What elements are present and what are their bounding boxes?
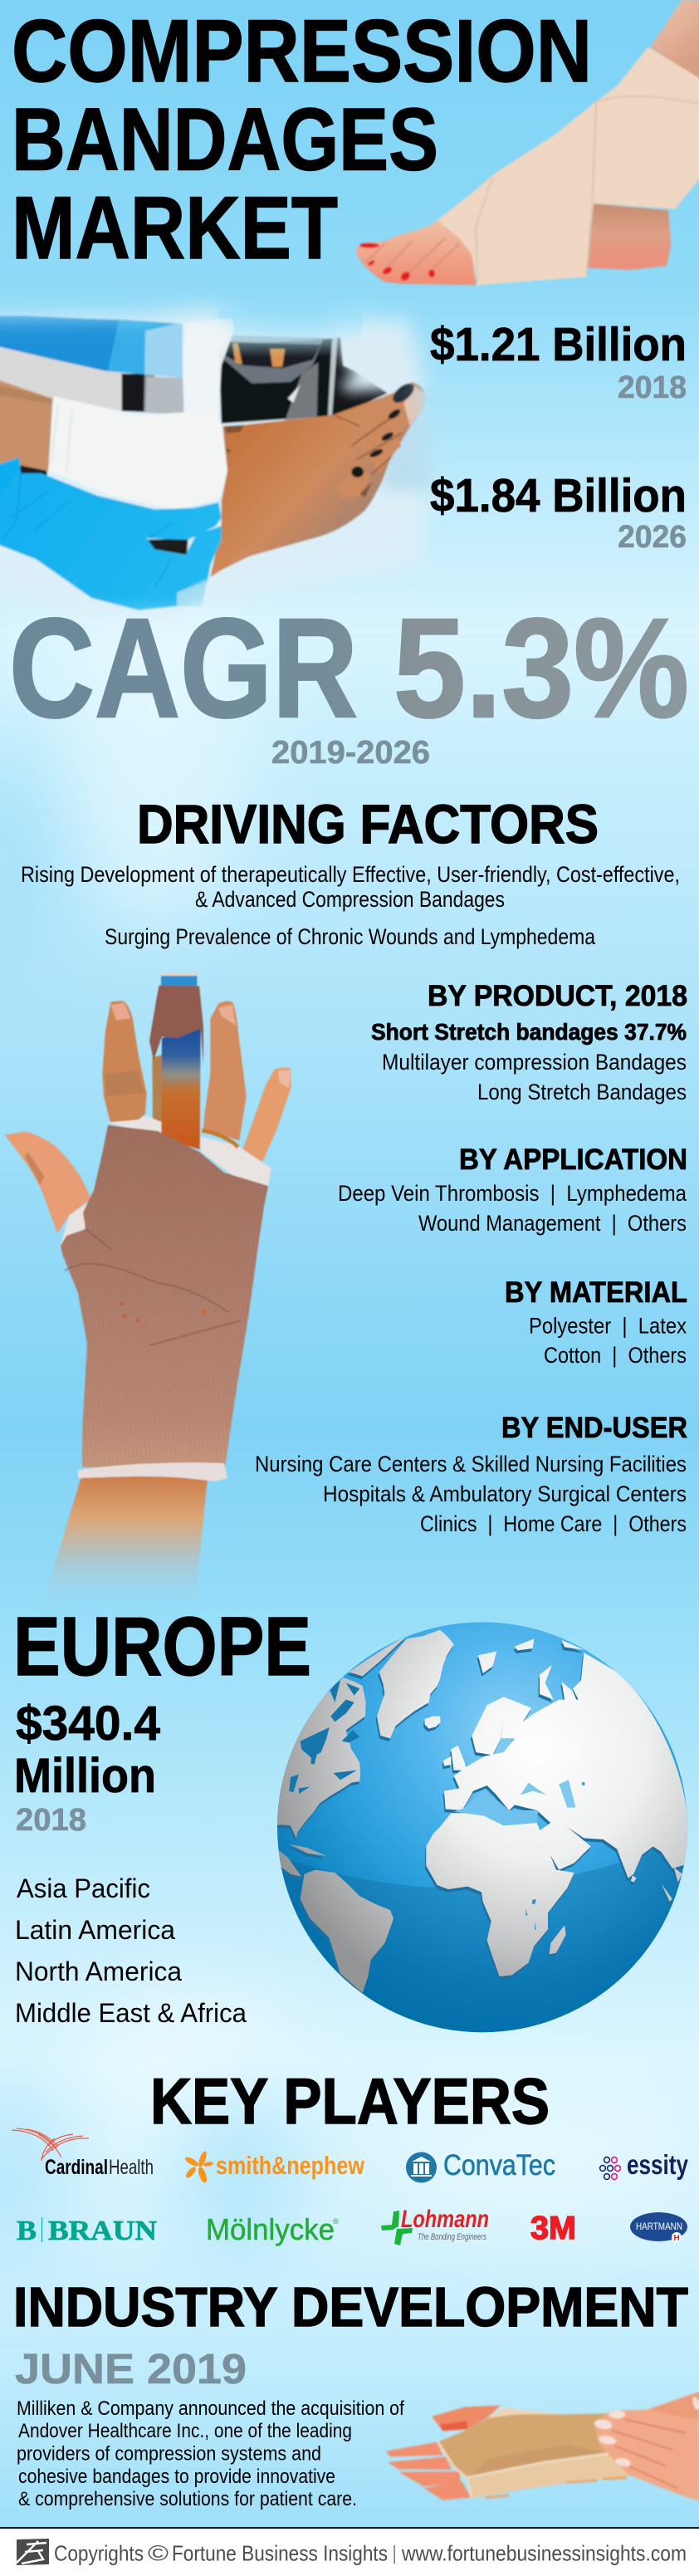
stat: 2018 market size — [430, 318, 687, 405]
logo: Lohmann: Lohmann — [401, 2206, 489, 2233]
list: other regions: Middle East & Africa — [15, 1998, 247, 2028]
logo: smith & nephew — [183, 2150, 365, 2184]
stat: 2026 market size: 2026 — [618, 520, 687, 555]
stat: 2018 market size: 2018 — [618, 370, 687, 405]
segment: by end-user — [255, 1412, 687, 1536]
logo: Hartmann: HARTMANN — [636, 2221, 682, 2232]
image: bandaged foot with red toenails — [355, 0, 699, 285]
CAGR headline — [9, 590, 689, 747]
logo: essity — [600, 2149, 689, 2180]
text: industry development description: cohesive bandages to provide innovative — [18, 2466, 335, 2488]
segment: by application: BY APPLICATION — [459, 1144, 687, 1176]
title: COMPRESSION — [12, 1, 592, 100]
title: BANDAGES — [12, 90, 438, 189]
copyright text: Fortune Business Insights — [172, 2541, 388, 2566]
stat: Europe market size — [14, 1697, 160, 1838]
segment: by material — [505, 1276, 687, 1368]
copyright text: Copyrights — [54, 2541, 144, 2566]
stat: Europe market size: 2018 — [16, 1803, 86, 1838]
heading: driving factors: DRIVING FACTORS — [137, 793, 599, 855]
logo: Hartmann: H — [674, 2234, 680, 2243]
logo: 3M: 3M — [530, 2211, 576, 2246]
image: wrist brace on hand — [386, 2392, 699, 2501]
text: driving factors list: & Advanced Compression Bandages — [195, 887, 505, 912]
stat: 2026 market size — [430, 469, 687, 555]
logo: Molnlycke: ® — [333, 2217, 339, 2226]
footer bar — [0, 2527, 699, 2576]
image: globe — [274, 1622, 692, 2035]
stat: 2026 market size: $1.84 Billion — [430, 469, 687, 522]
logo: Molnlycke: Mölnlycke — [206, 2212, 335, 2246]
heading: Europe: EUROPE — [13, 1600, 311, 1693]
text: industry development description: Andover Healthcare Inc., one of the leading — [18, 2420, 352, 2442]
date: June 2019: JUNE 2019 — [15, 2345, 247, 2392]
logo: ConvaTec: ConvaTec — [443, 2149, 555, 2182]
text: industry development description: Milliken & Company announced the acquisition of — [17, 2397, 404, 2420]
segment: by end-user: BY END-USER — [501, 1412, 687, 1444]
image: bandaged hand with finger splint — [5, 973, 291, 1613]
logo: Lohmann: The Bonding Engineers — [418, 2232, 486, 2242]
logo: B. Braun: BRAUN — [48, 2216, 157, 2246]
logo: Fortune Business Insights — [17, 2539, 49, 2565]
copyright text — [54, 2541, 687, 2566]
segment: by material: BY MATERIAL — [505, 1276, 687, 1309]
stat: 2018 market size: $1.21 Billion — [430, 318, 687, 371]
segment: by product: Short Stretch bandages 37.7% — [371, 1019, 687, 1045]
text: driving factors list — [21, 862, 680, 949]
stat: Europe market size: $340.4 — [16, 1697, 160, 1751]
logo: smith & nephew: smith&nephew — [216, 2151, 365, 2180]
logo: ConvaTec — [406, 2149, 555, 2182]
list: other regions: North America — [15, 1956, 182, 1986]
text: industry development description — [17, 2397, 404, 2510]
title: MARKET — [12, 178, 338, 277]
title — [12, 1, 592, 277]
logo: Hartmann — [630, 2212, 687, 2243]
logo: Cardinal Health — [12, 2128, 154, 2179]
logo: B. Braun: B — [17, 2216, 37, 2246]
segment: by product — [371, 980, 687, 1104]
stat: Europe market size: Million — [14, 1749, 156, 1803]
segment: by product: BY PRODUCT, 2018 — [428, 980, 687, 1012]
list: other regions — [15, 1873, 247, 2028]
list: other regions: Latin America — [15, 1915, 175, 1945]
CAGR period: 2019-2026 — [271, 735, 430, 771]
logo: Lohmann — [381, 2206, 489, 2245]
logo: Cardinal Health: Health — [109, 2156, 154, 2179]
CAGR headline: CAGR — [9, 590, 358, 747]
copyright text: © — [148, 2541, 169, 2566]
list: other regions: Asia Pacific — [17, 1873, 150, 1903]
text: industry development description: providers of compression systems and — [17, 2443, 321, 2465]
image: gloved hands wrapping gauze around a foot — [0, 298, 433, 611]
text: industry development description: & comprehensive solutions for patient care. — [18, 2488, 357, 2510]
segment: by application — [338, 1144, 687, 1236]
text: driving factors list: Surging Prevalence of Chronic Wounds and Lymphedema — [105, 924, 595, 949]
heading: key players: KEY PLAYERS — [150, 2064, 550, 2138]
logo: Cardinal Health: Cardinal — [45, 2156, 108, 2179]
